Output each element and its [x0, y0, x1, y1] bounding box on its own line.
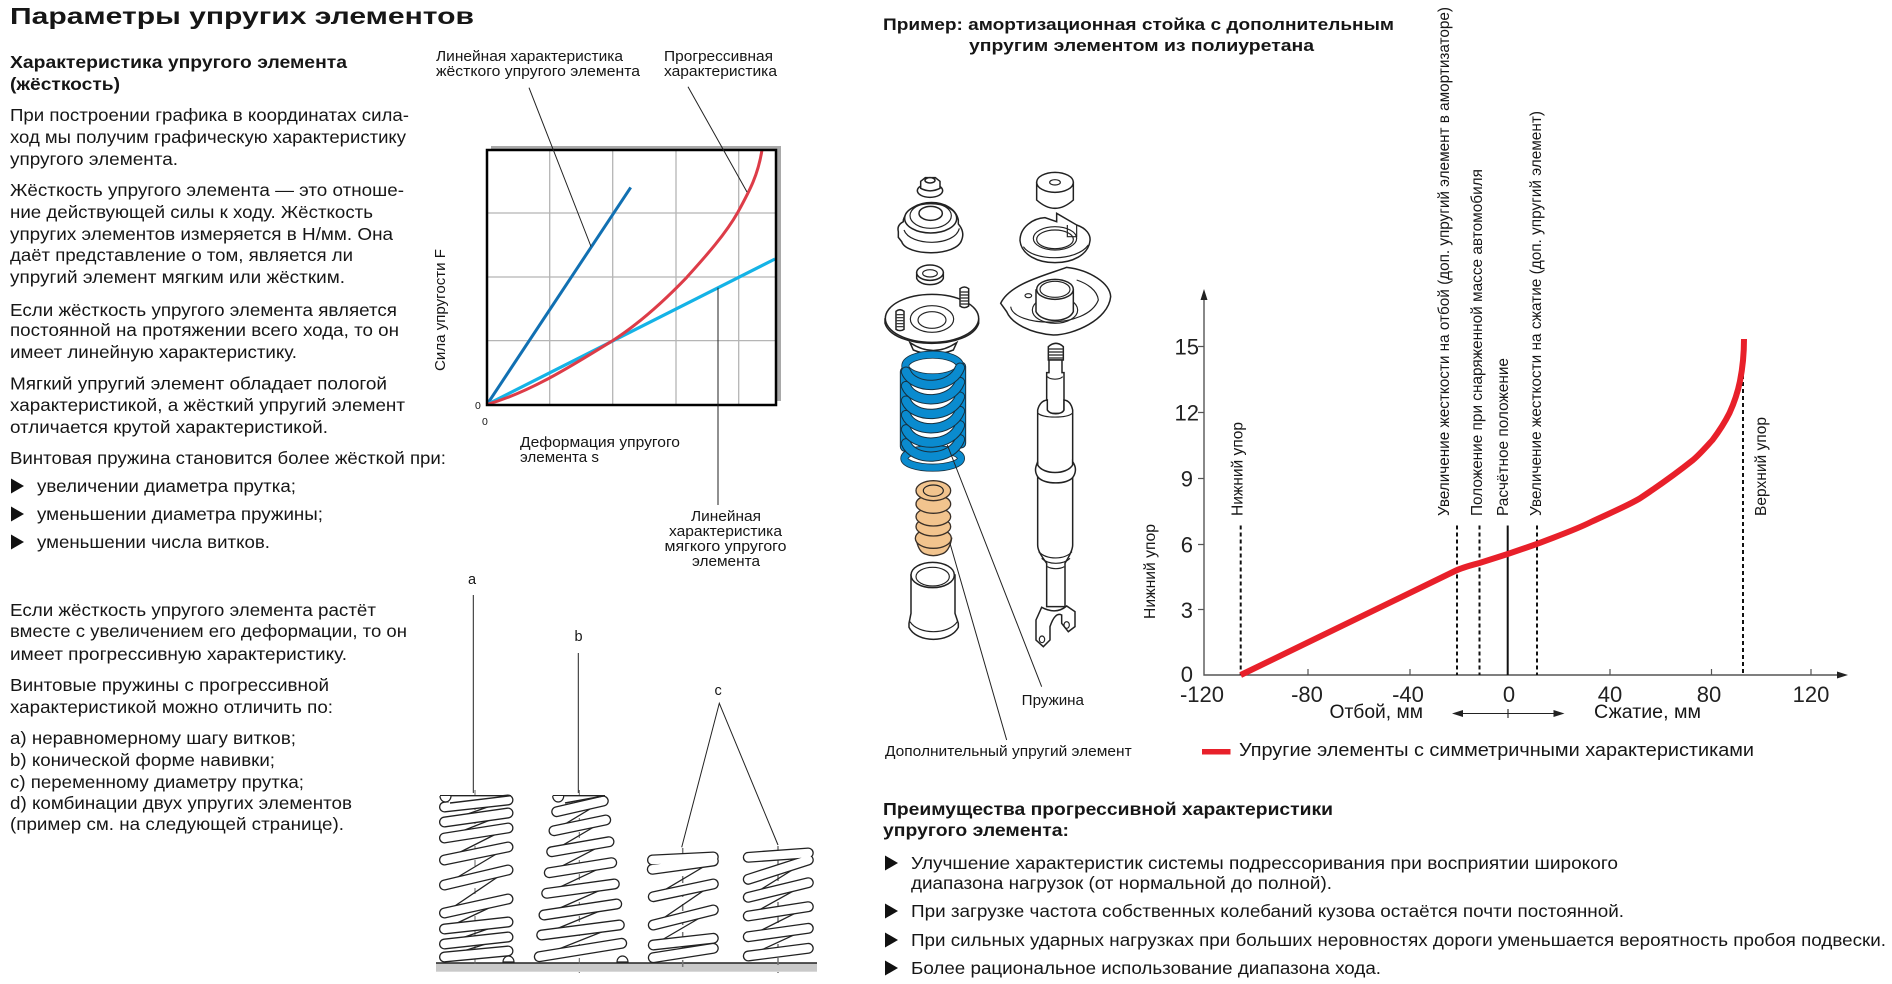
x axis numbers: 40 — [1598, 682, 1622, 707]
panel: advantages of progressive characteristic — [883, 799, 1886, 978]
bullet icons — [885, 856, 898, 976]
leader lines — [947, 445, 1042, 740]
text block: linear characteristic: имеет линейную характеристику. — [10, 342, 297, 362]
y axis numbers: 12 — [1175, 400, 1199, 426]
y axis numbers — [1175, 334, 1199, 687]
label: c: c — [714, 683, 722, 699]
text block: graph definition: упругого элемента. — [10, 149, 178, 169]
diagram: exploded strut — [885, 172, 1111, 740]
heading: advantages — [883, 799, 1333, 840]
text block: progressive characteristic: Если жёсткость упругого элемента растёт — [10, 600, 376, 620]
spring b — [539, 790, 628, 973]
curve — [1241, 339, 1744, 675]
icon: top mount — [898, 202, 963, 253]
bullet list: advantages: Более рациональное использование диапазона хода. — [911, 958, 1381, 978]
marker labels: Нижний упор — [1230, 422, 1247, 516]
x axis numbers — [1180, 682, 1829, 707]
text block: distinguishing progressive springs: Винтовые пружины с прогрессивной — [10, 675, 329, 695]
panel: left text column — [10, 52, 446, 834]
label: soft element: Линейная — [691, 509, 761, 525]
label: b: b — [574, 629, 583, 645]
spring a — [440, 790, 514, 968]
line: stiff linear characteristic — [487, 187, 631, 404]
icon: spring plate — [1001, 267, 1111, 335]
heading: advantages: упругого элемента: — [883, 820, 1069, 840]
x axis numbers: 80 — [1697, 682, 1721, 707]
bullet list: advantages: Улучшение характеристик системы подрессоривания при восприятии широкого — [911, 853, 1618, 873]
icon: nut — [917, 178, 943, 197]
label: soft element — [664, 509, 786, 570]
y axis numbers: 3 — [1181, 598, 1193, 623]
y axis numbers: 9 — [1181, 466, 1193, 492]
legend: Упругие элементы с симметричными характеристиками — [1239, 739, 1754, 760]
text block: graph definition: ход мы получим графическую характеристику — [10, 127, 406, 147]
label: x axis: Деформация упругого — [520, 435, 680, 451]
icon: dust boot — [909, 562, 958, 639]
list: spring types: b) конической форме навивки; — [10, 750, 275, 770]
x axis numbers: 0 — [1503, 682, 1515, 707]
icon: bump stop — [915, 481, 952, 556]
label: y axis: Сила упругости F — [433, 249, 449, 371]
marker labels: Положение при снаряженной массе автомобиля — [1469, 169, 1486, 516]
diagram: progressive springs — [436, 572, 817, 973]
x axis titles — [1330, 702, 1701, 723]
y axis title: Нижний упор — [1142, 524, 1159, 619]
icon: shock absorber — [1035, 343, 1075, 647]
marker labels: Увеличение жесткости на отбой (доп. упругий элемент в амортизаторе) — [1436, 7, 1453, 516]
list: spring types: d) комбинации двух упругих элементов — [10, 793, 352, 813]
text block: linear characteristic — [10, 300, 399, 362]
label: soft element: мягкого упругого — [664, 539, 786, 555]
label: origin zeros: 0 — [475, 400, 481, 412]
marker labels: Увеличение жесткости на сжатие (доп. упругий элемент) — [1528, 111, 1545, 516]
heading: strut example: Пример: амортизационная стойка с дополнительным — [883, 16, 1394, 34]
label: a: a — [468, 572, 477, 588]
icon: bearing plate — [885, 287, 979, 354]
label: stiff element: Линейная характеристика — [436, 49, 624, 65]
bullet list: advantages: При загрузке частота собственных колебаний кузова остаётся почти постоянной. — [911, 901, 1624, 921]
icon: washer — [917, 265, 943, 285]
marker labels — [1230, 7, 1770, 516]
x axis titles: Отбой, мм — [1330, 702, 1423, 723]
leader lines — [473, 595, 778, 847]
bullet list: stiffness factors: увеличении диаметра прутка; — [37, 476, 296, 496]
label: x axis: элемента s — [520, 450, 599, 466]
leader lines — [529, 87, 747, 505]
text block: progressive characteristic — [10, 600, 407, 664]
text block: soft and stiff: характеристикой, а жёсткий упругий элемент — [10, 395, 405, 415]
text block: distinguishing progressive springs — [10, 675, 333, 717]
text block: soft and stiff — [10, 374, 405, 437]
text block: linear characteristic: Если жёсткость упругого элемента является — [10, 300, 397, 320]
text block: stiffness definition: упругих элементов измеряется в Н/мм. Она — [10, 224, 393, 244]
text block: linear characteristic: постоянной на протяжении всего хода, то он — [10, 320, 399, 340]
icon: blue coil spring — [904, 355, 961, 468]
label: progressive — [664, 49, 778, 80]
list: spring types: (пример см. на следующей странице). — [10, 814, 344, 834]
text block: stiffness definition — [10, 180, 404, 287]
icon: spring cap — [1037, 172, 1073, 208]
heading: advantages: Преимущества прогрессивной характеристики — [883, 799, 1333, 819]
label: soft element: характеристика — [669, 524, 783, 540]
x axis numbers: 120 — [1793, 682, 1829, 707]
text block: stiffness definition: даёт представление о том, является ли — [10, 245, 353, 265]
title: Параметры упругих элементов — [10, 3, 474, 29]
label: x axis — [520, 435, 680, 466]
line: soft linear characteristic — [487, 259, 775, 404]
heading: stiffness — [10, 52, 347, 94]
chart: force versus deformation — [433, 49, 786, 570]
text block: soft and stiff: Мягкий упругий элемент обладает пологой — [10, 374, 387, 394]
spring c left — [652, 848, 713, 973]
marker labels: Верхний упор — [1753, 417, 1770, 516]
text block: coil spring becomes stiffer: Винтовая пружина становится более жёсткой при: — [10, 448, 446, 468]
y axis numbers: 0 — [1181, 662, 1193, 687]
marker lines — [1241, 368, 1743, 675]
label: stiff element: жёсткого упругого элемента — [436, 64, 641, 80]
list: spring types: a) неравномерному шагу витков; — [10, 728, 296, 748]
x axis titles: Сжатие, мм — [1594, 702, 1701, 723]
text block: stiffness definition: Жёсткость упругого элемента — это отноше- — [10, 180, 404, 200]
list: spring types — [10, 728, 352, 834]
text block: stiffness definition: ние действующей силы к ходу. Жёсткость — [10, 202, 373, 222]
spring c right — [748, 846, 808, 973]
icon: spring seat — [1020, 213, 1090, 263]
x axis numbers: -120 — [1180, 682, 1224, 707]
ground — [436, 963, 817, 972]
text block: distinguishing progressive springs: характеристикой можно отличить по: — [10, 697, 333, 717]
label: progressive: характеристика — [664, 64, 778, 80]
marker labels: Расчётное положение — [1495, 358, 1512, 516]
x axis numbers: -40 — [1392, 682, 1424, 707]
bullet list: stiffness factors: уменьшении диаметра пружины; — [37, 504, 323, 524]
text block: progressive characteristic: имеет прогрессивную характеристику. — [10, 644, 347, 664]
text block: soft and stiff: отличается крутой характеристикой. — [10, 417, 328, 437]
bullet list: stiffness factors — [11, 476, 323, 552]
line: progressive characteristic — [487, 150, 762, 404]
direction arrows — [1452, 709, 1564, 718]
bullet list: advantages: диапазона нагрузок (от нормальной до полной). — [911, 873, 1332, 893]
heading: strut example — [883, 16, 1394, 55]
list: spring types: c) переменному диаметру прутка; — [10, 772, 304, 792]
axes — [1198, 289, 1848, 678]
text block: graph definition: При построении графика в координатах сила- — [10, 105, 409, 125]
label: stiff element — [436, 49, 641, 80]
x axis numbers: -80 — [1291, 682, 1323, 707]
chart: strut stiffness curve — [1142, 7, 1848, 760]
label: spring: Пружина — [1022, 693, 1085, 709]
label: origin zeros: 0 — [482, 416, 488, 428]
heading: strut example: упругим элементом из полиуретана — [969, 37, 1315, 55]
bullet list: stiffness factors: уменьшении числа витков. — [37, 532, 270, 552]
label: additional elastic element: Дополнительный упругий элемент — [885, 744, 1132, 760]
y axis numbers: 6 — [1181, 532, 1193, 558]
y axis numbers: 15 — [1175, 334, 1199, 360]
text block: stiffness definition: упругий элемент мягким или жёстким. — [10, 267, 345, 287]
heading: stiffness: (жёсткость) — [10, 74, 120, 94]
heading: stiffness: Характеристика упругого элемента — [10, 52, 347, 72]
label: origin zeros — [475, 400, 488, 428]
text block: graph definition — [10, 105, 409, 169]
bullet list: advantages — [911, 853, 1886, 978]
bullet list: advantages: При сильных ударных нагрузках при больших неровностях дороги уменьшается вероятность пробоя подвески. — [911, 930, 1886, 950]
label: progressive: Прогрессивная — [664, 49, 773, 65]
text block: progressive characteristic: вместе с увеличением его деформации, то он — [10, 621, 407, 641]
label: soft element: элемента — [692, 554, 761, 570]
